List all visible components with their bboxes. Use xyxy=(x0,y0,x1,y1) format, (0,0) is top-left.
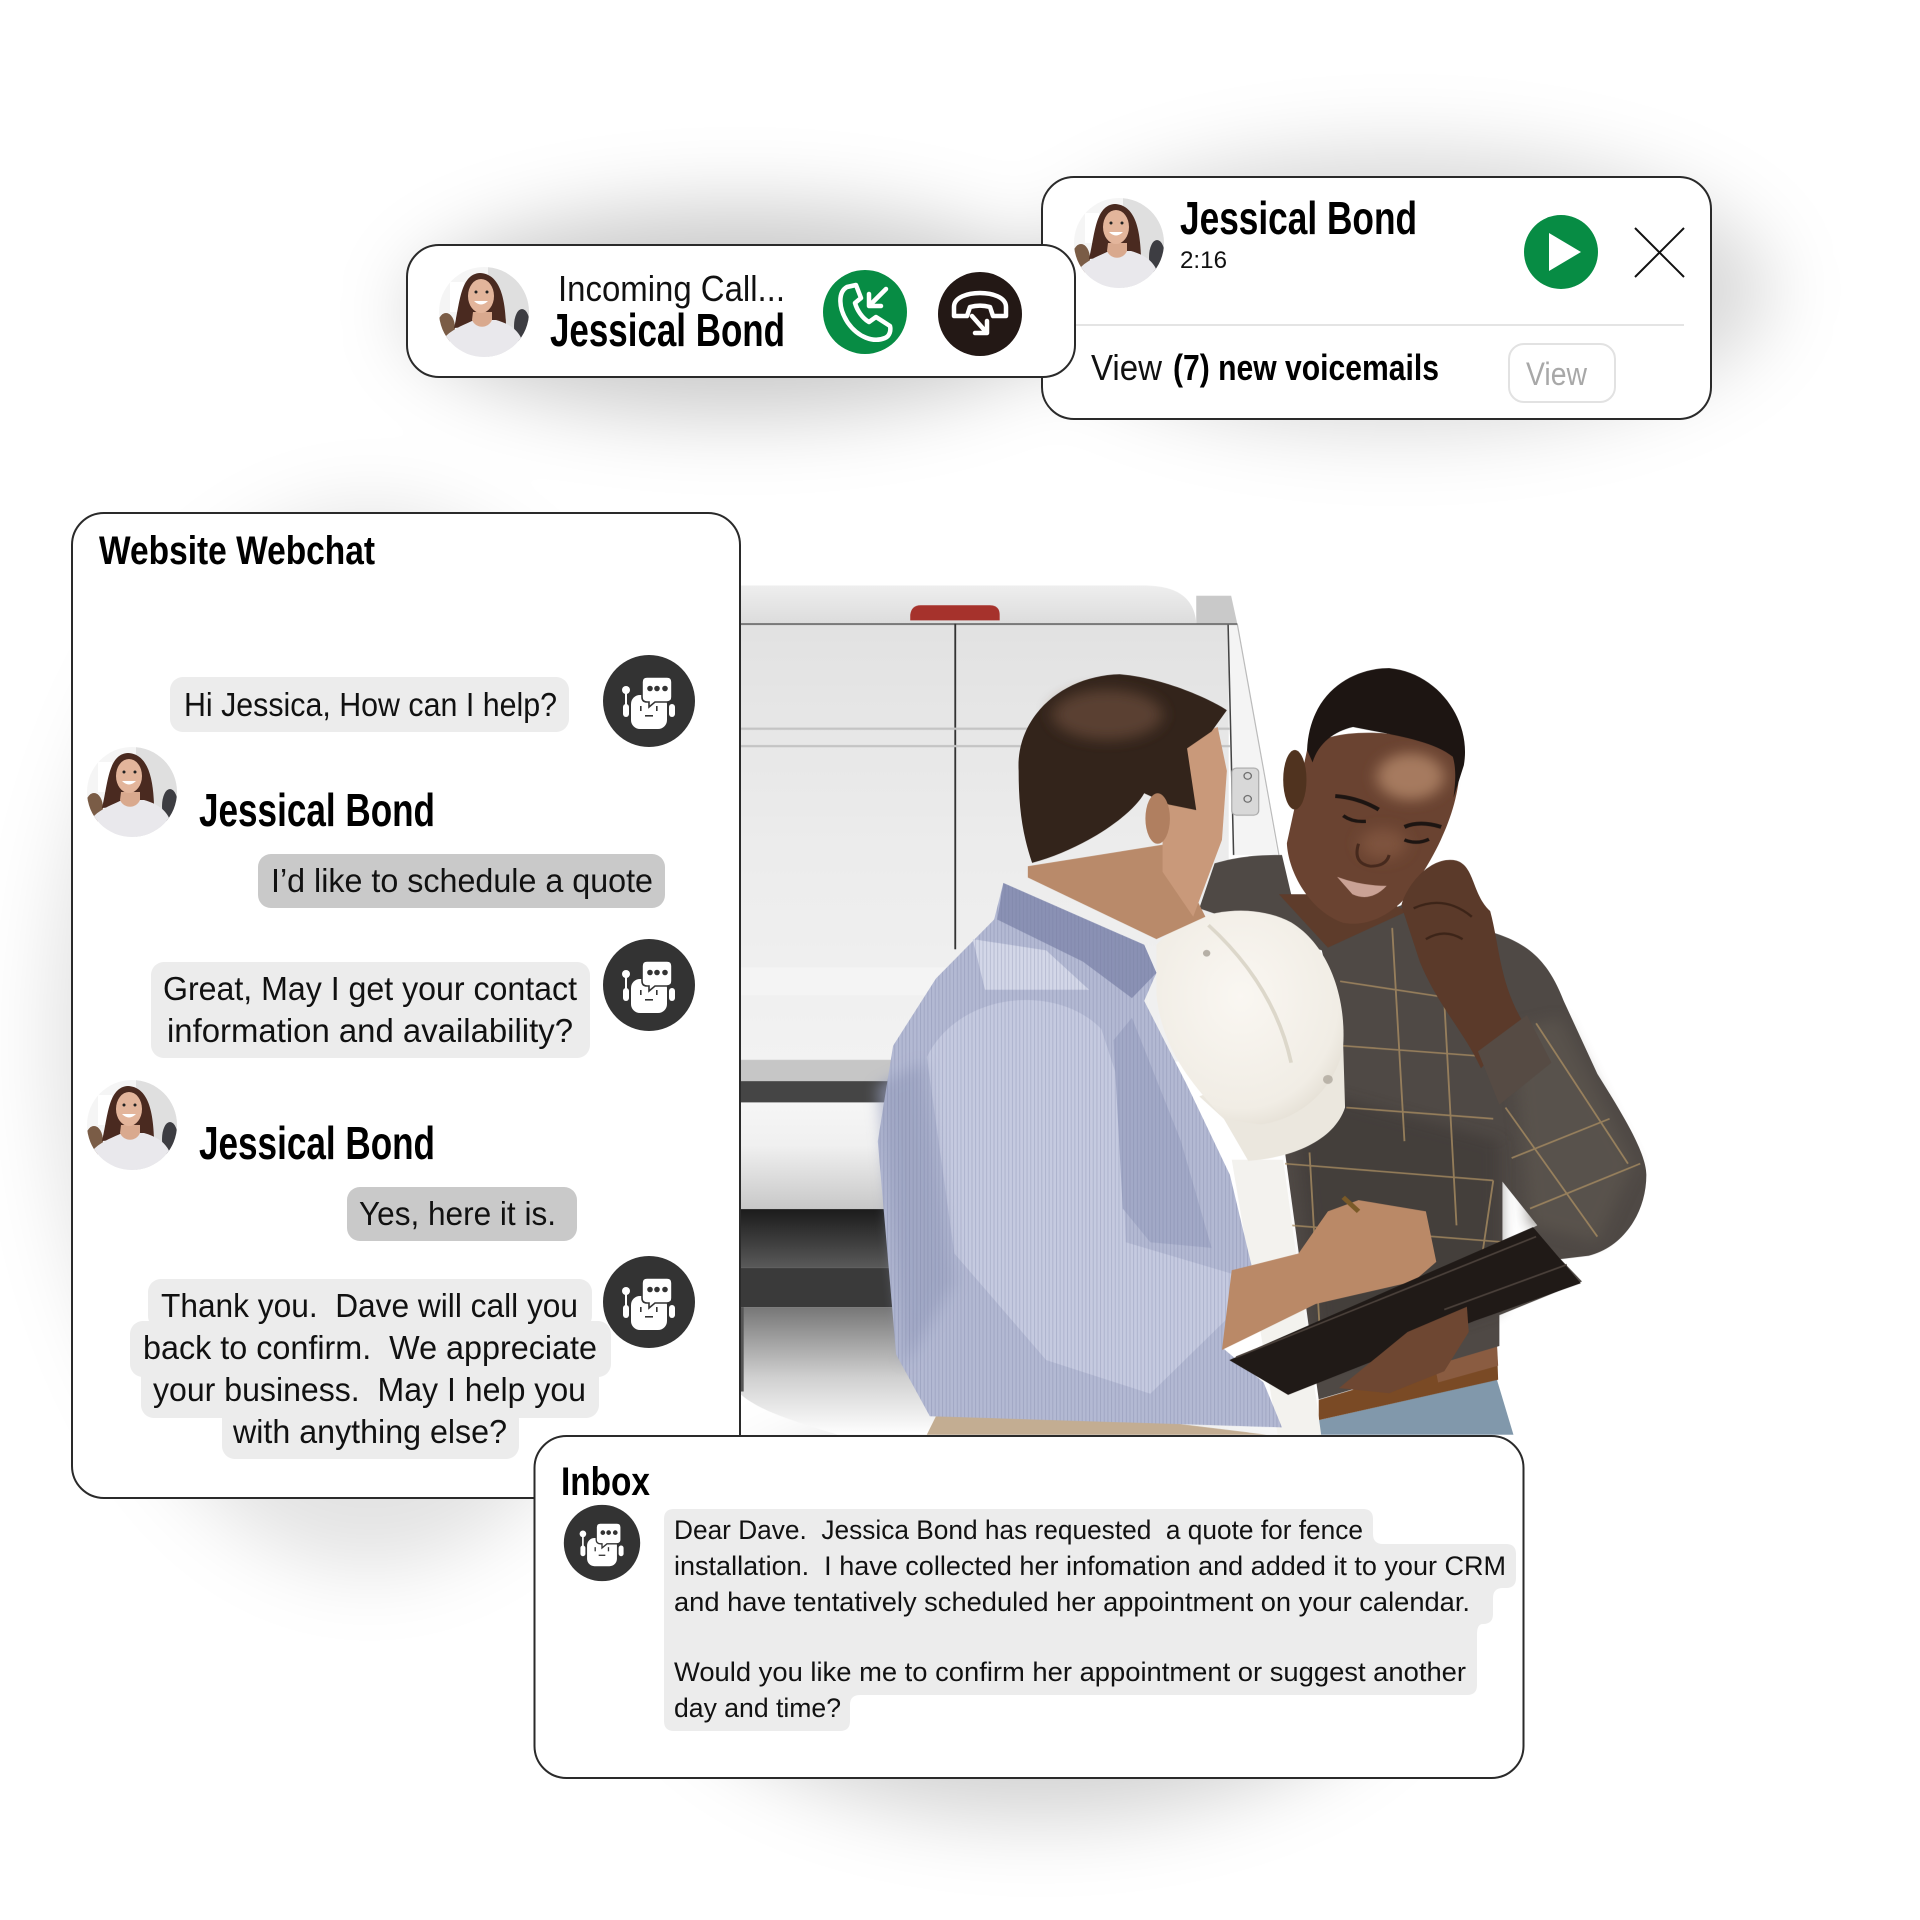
panel: inbox xyxy=(534,1436,1524,1778)
icon: close xyxy=(1635,228,1684,277)
new voicemails text: View xyxy=(1091,347,1163,388)
new voicemails text: (7) new voicemails xyxy=(1173,347,1439,388)
rolled plans tube xyxy=(1232,1160,1321,1435)
bot avatar 1 xyxy=(603,655,695,747)
photo: van and two workers xyxy=(740,586,1646,1435)
bot message 3: back to confirm. We appreciate xyxy=(143,1329,597,1366)
heading: inbox: Inbox xyxy=(561,1460,650,1504)
voicemail duration: 2:16 xyxy=(1180,247,1227,274)
bot message 3: your business. May I help you xyxy=(153,1371,586,1408)
icon: decline call xyxy=(938,272,1022,356)
customer name 1: Jessical Bond xyxy=(199,784,435,836)
bot avatar 3 xyxy=(603,1256,695,1348)
panel: incoming call xyxy=(407,245,1075,377)
bot message 2: Great, May I get your contact xyxy=(163,970,577,1007)
heading: website webchat: Website Webchat xyxy=(99,529,375,573)
customer avatar 1 xyxy=(85,747,178,842)
customer name 2: Jessical Bond xyxy=(199,1117,435,1169)
caller avatar xyxy=(1072,198,1165,293)
card drop shadows xyxy=(50,150,1770,1820)
white van rear xyxy=(740,586,1279,1435)
customer message 1: I’d like to schedule a quote xyxy=(271,862,653,899)
bot message 3: Thank you. Dave will call you xyxy=(161,1287,578,1324)
icon: answer call xyxy=(823,270,907,354)
customer message 2 xyxy=(347,1187,577,1241)
view button xyxy=(1509,344,1615,402)
caller name: Jessical Bond xyxy=(550,304,785,356)
view button: View xyxy=(1526,356,1588,392)
bot avatar xyxy=(564,1505,640,1581)
inbox message: Dear Dave. Jessica Bond has requested a quote for fence xyxy=(674,1515,1363,1545)
customer message 1 xyxy=(258,854,665,908)
black leather folder and hand xyxy=(1229,1197,1581,1395)
panel: voicemail xyxy=(1042,177,1711,419)
icon: play button xyxy=(1524,215,1598,289)
incoming call label: Incoming Call... xyxy=(558,268,785,309)
bot message 3: with anything else? xyxy=(232,1413,507,1450)
panel: website webchat xyxy=(72,513,740,1498)
bot message 3 xyxy=(130,1279,611,1459)
inbox message: Would you like me to confirm her appointment or suggest another xyxy=(674,1657,1466,1687)
inbox message: installation. I have collected her infomation and added it to your CRM xyxy=(674,1551,1506,1581)
customer avatar 2 xyxy=(85,1080,178,1175)
bot message 1: Hi Jessica, How can I help? xyxy=(184,686,557,723)
bot avatar 2 xyxy=(603,939,695,1031)
inbox message: day and time? xyxy=(674,1693,841,1723)
caller name: Jessical Bond xyxy=(1180,192,1417,244)
bot message 1 xyxy=(170,677,569,732)
white hard hat xyxy=(1156,911,1345,1161)
bot message 2 xyxy=(151,962,590,1058)
inbox message: and have tentatively scheduled her appointment on your calendar. xyxy=(674,1587,1470,1617)
caller avatar xyxy=(437,267,530,362)
customer message 2: Yes, here it is. xyxy=(359,1195,556,1232)
worker in striped blue shirt xyxy=(878,674,1436,1435)
new voicemails text xyxy=(1091,347,1439,388)
worker on phone in plaid shirt xyxy=(1199,668,1646,1435)
inbox message xyxy=(664,1509,1516,1731)
bot message 2: information and availability? xyxy=(167,1012,573,1049)
